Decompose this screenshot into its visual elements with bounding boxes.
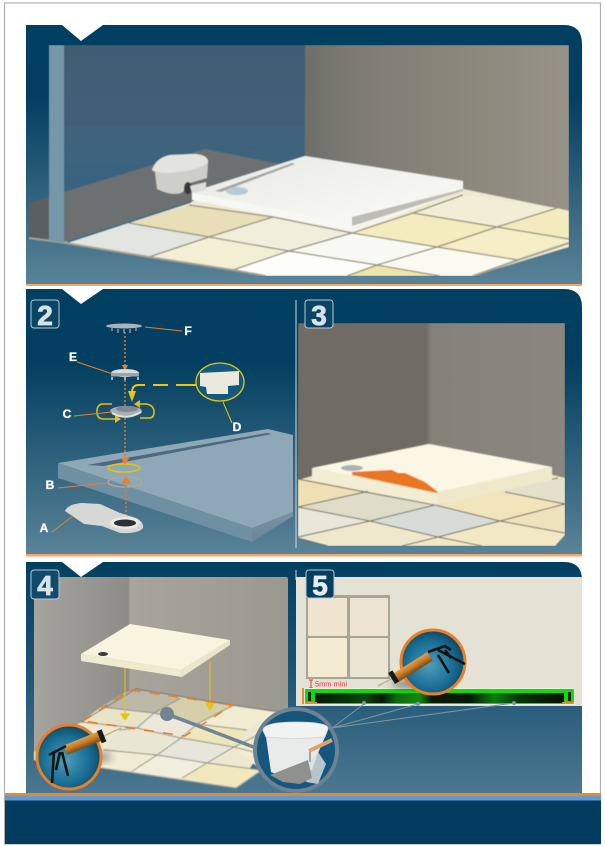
orange spirit level bbox=[352, 470, 438, 493]
icon: sealant gun step 5 bbox=[378, 630, 465, 694]
orange leader lines bbox=[52, 327, 182, 532]
pointer lines to joint bbox=[332, 702, 516, 728]
scene: room with walls and floor bbox=[29, 45, 569, 276]
panel: steps 4 and 5 bbox=[26, 562, 582, 793]
step 3 scene: level on tray bbox=[298, 323, 565, 546]
step 5 wall section bbox=[296, 577, 582, 706]
step 2 exploded drain assembly bbox=[40, 324, 293, 542]
step 3 number badge: 3 bbox=[311, 300, 327, 331]
part labels bbox=[40, 324, 242, 535]
part labels: C bbox=[63, 407, 72, 421]
part C bbox=[110, 406, 142, 417]
tray bbox=[312, 444, 552, 505]
footer band bbox=[5, 793, 601, 844]
5mm minimum gap: 5mm mini bbox=[315, 680, 347, 688]
part F cap bbox=[106, 324, 142, 333]
step 2 number badge: 2 bbox=[37, 300, 53, 331]
green sealed joint bbox=[302, 688, 575, 705]
part labels: F bbox=[184, 324, 192, 338]
panel: step 1 shower tray installed with pump bbox=[26, 25, 582, 286]
four wall tiles bbox=[306, 595, 390, 679]
suspended tray bbox=[81, 624, 230, 677]
tray top and sides bbox=[192, 156, 463, 232]
yellow rotation arrows bbox=[97, 404, 154, 419]
step 4 scene bbox=[34, 577, 288, 788]
detail D callout bbox=[128, 363, 244, 423]
part labels: D bbox=[233, 420, 242, 434]
part labels: E bbox=[69, 350, 77, 364]
divider 4 5 bbox=[296, 570, 297, 580]
step 3 number badge bbox=[305, 300, 333, 331]
step 2 number badge bbox=[31, 300, 59, 331]
waste pump bbox=[152, 154, 208, 194]
tiled floor bbox=[34, 689, 288, 788]
part A waste body bbox=[65, 503, 143, 533]
dotted assembly axis bbox=[125, 332, 126, 520]
step 4 number badge: 4 bbox=[37, 570, 53, 601]
yellow drop arrows bbox=[121, 662, 214, 720]
step 5 number badge: 5 bbox=[312, 570, 328, 601]
icon: sealant gun step 4 bbox=[37, 725, 121, 789]
panel: steps 2 and 3 bbox=[26, 289, 582, 556]
icon: bucket and trowel magnifier bbox=[255, 709, 337, 791]
part labels: A bbox=[40, 521, 49, 535]
part labels: B bbox=[46, 478, 55, 492]
orange dashed silicone outline bbox=[83, 690, 232, 736]
part E bbox=[111, 369, 139, 380]
pointer from floor to bucket bbox=[160, 707, 256, 748]
step 5 number badge bbox=[306, 570, 334, 601]
tray in blue tint bbox=[58, 429, 293, 542]
glass screen strip bbox=[49, 45, 64, 243]
step 4 number badge bbox=[31, 570, 59, 601]
